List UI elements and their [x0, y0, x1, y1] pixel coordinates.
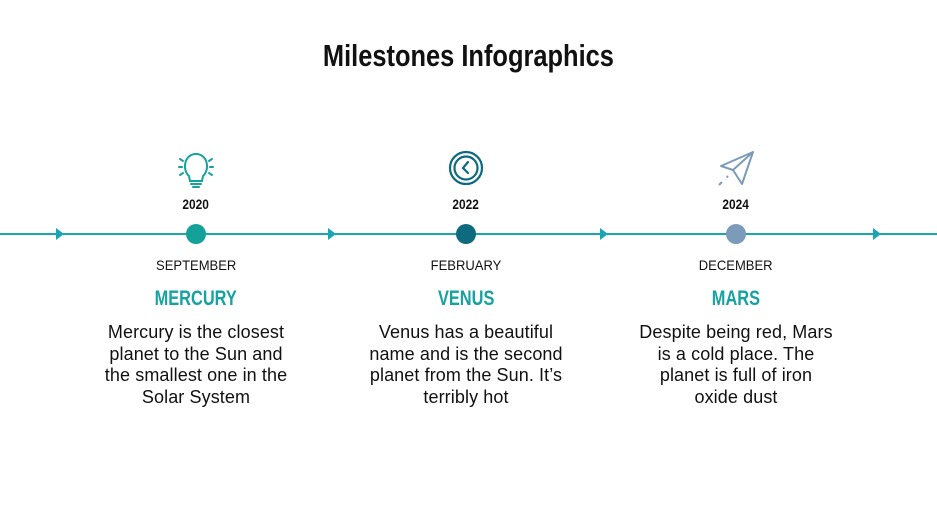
- dot 2022: [456, 224, 476, 244]
- column: mercury: planet to the Sun and: [109, 344, 283, 364]
- column: mercury: MERCURY: [155, 287, 237, 310]
- column: mercury: 2020: [183, 196, 209, 212]
- column: venus: [369, 196, 563, 407]
- column: mars: DECEMBER: [699, 257, 773, 273]
- column: mercury: Mercury is the closest: [108, 322, 284, 342]
- dot 2020: [186, 224, 206, 244]
- icon: paper plane: [719, 152, 753, 185]
- title: Milestones Infographics: [323, 38, 614, 73]
- column: mercury: SEPTEMBER: [156, 257, 236, 273]
- arrows: [56, 228, 881, 240]
- column: venus: 2022: [453, 196, 479, 212]
- column: mercury: the smallest one in the: [105, 365, 287, 385]
- column: mercury: [105, 196, 287, 407]
- icon: clock: [450, 152, 482, 184]
- column: mars: 2024: [723, 196, 749, 212]
- column: venus: FEBRUARY: [431, 257, 501, 273]
- column: mars: MARS: [712, 287, 760, 310]
- dot 2024: [726, 224, 746, 244]
- column: venus: planet from the Sun. It’s: [370, 365, 562, 385]
- column: mars: planet is full of iron: [660, 365, 812, 385]
- icon: lightbulb: [179, 154, 213, 187]
- column: mars: [639, 196, 833, 407]
- column: venus: name and is the second: [369, 344, 563, 364]
- column: mars: Despite being red, Mars: [639, 322, 833, 342]
- column: venus: terribly hot: [423, 387, 509, 407]
- column: mars: oxide dust: [694, 387, 778, 407]
- column: venus: VENUS: [438, 287, 494, 310]
- column: mercury: Solar System: [142, 387, 250, 407]
- column: venus: Venus has a beautiful: [379, 322, 553, 342]
- column: mars: is a cold place. The: [658, 344, 814, 364]
